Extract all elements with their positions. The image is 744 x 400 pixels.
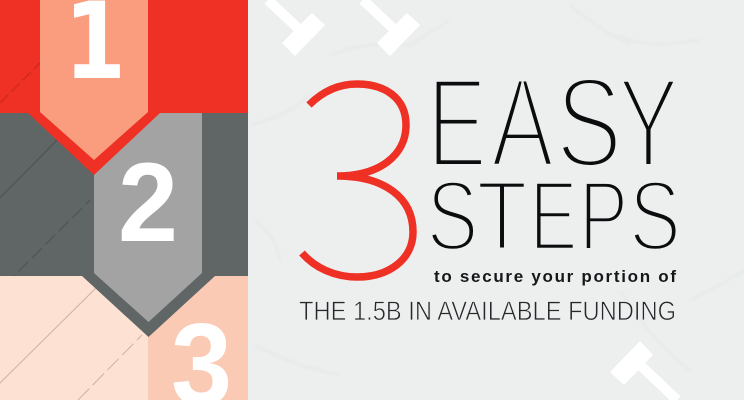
- solid diagonal line on grey band: [0, 134, 63, 198]
- panel: step 3 peach band: [0, 276, 248, 400]
- number 2: 2: [118, 140, 178, 265]
- peach ribbon: [148, 276, 248, 400]
- subheading: to secure your portion of: to secure your portion of: [434, 267, 676, 286]
- big red numeral 3: [302, 84, 413, 277]
- red chevron point: [28, 113, 160, 175]
- heading: EASY: [427, 51, 679, 195]
- heading: STEPS: [427, 160, 681, 272]
- ribbon: step 1: [40, 0, 148, 160]
- grey band left of ribbon below red chevron: [28, 113, 94, 175]
- heading: EASY: A: [491, 51, 554, 194]
- heading: EASY: S: [556, 52, 622, 195]
- ribbon: step 2: [94, 113, 202, 322]
- solid diagonal line on peach band: [0, 288, 96, 383]
- heading: EASY: E: [427, 52, 487, 195]
- heading: STEPS: S: [427, 160, 478, 271]
- panel: step 2 grey band: [0, 113, 248, 285]
- heading: STEPS: T: [476, 161, 528, 272]
- dashed diagonal line on grey band: [5, 200, 90, 285]
- icon: white T marker bottom: [610, 341, 677, 400]
- panel: step 1 red band: [0, 0, 248, 113]
- subheading: the 1.5B in available funding: THE 1.5B IN AVAILABLE FUNDING: [299, 296, 676, 326]
- dashed line on red band: [0, 63, 40, 103]
- heading: STEPS: S: [629, 160, 681, 271]
- icon: white T marker right: [363, 0, 420, 56]
- heading: EASY: Y: [618, 51, 679, 195]
- icon: white T marker left: [268, 0, 325, 56]
- dashed diagonal line on peach band: [78, 335, 142, 400]
- marble background: [248, 0, 744, 400]
- heading: STEPS: E: [530, 162, 577, 272]
- heading: STEPS: P: [579, 160, 628, 272]
- grey chevron point: [82, 276, 215, 337]
